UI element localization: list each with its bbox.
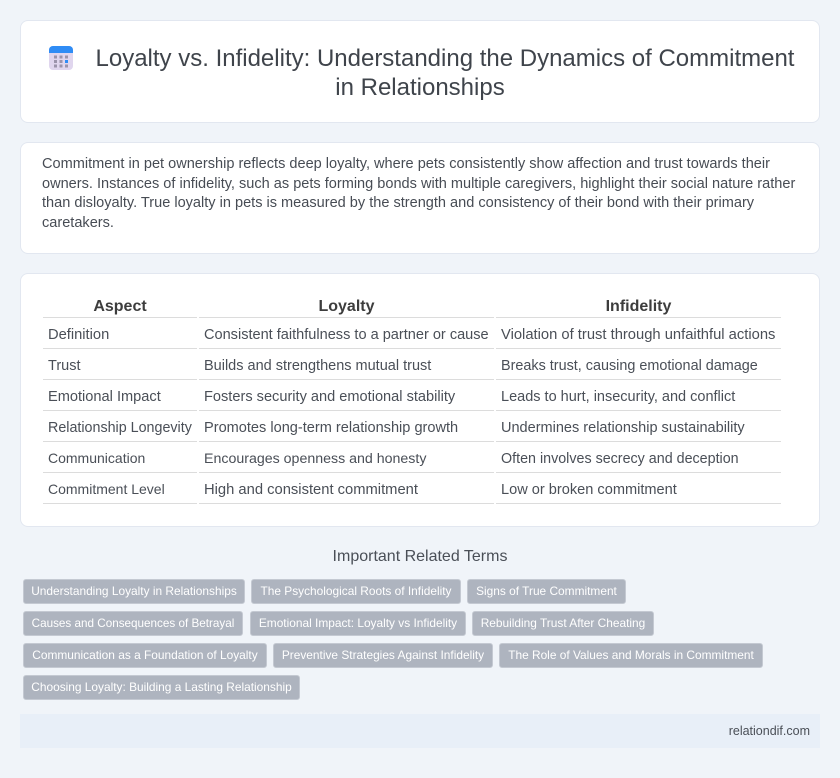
row: Trust: Trust <box>48 358 80 374</box>
row: Relationship Longevity: Relationship Longevity <box>48 420 192 436</box>
Trust infidelity: Breaks trust, causing emotional damage <box>501 358 758 374</box>
Emotional Impact infidelity: Leads to hurt, insecurity, and conflict <box>501 389 735 405</box>
Emotional Impact loyalty: Fosters security and emotional stability <box>204 389 455 405</box>
intro text: Commitment in pet ownership reflects deep loyalty, where pets consistently show affection and trust towards their <box>42 156 770 172</box>
row: Commitment Level: Commitment Level <box>48 481 165 497</box>
tag: Causes and Consequences of Betrayal <box>32 617 234 630</box>
panel: introduction <box>20 142 820 254</box>
tag: The Psychological Roots of Infidelity <box>260 584 452 598</box>
panel: header <box>20 20 820 123</box>
intro text: than disloyalty. True loyalty in pets is measured by the strength and consistency of their bond with their primary <box>42 195 754 211</box>
tag: Choosing Loyalty: Building a Lasting Relationship <box>31 680 292 694</box>
Communication loyalty: Encourages openness and honesty <box>204 451 426 467</box>
tag: Emotional Impact: Loyalty vs Infidelity <box>259 616 457 630</box>
title <box>96 45 794 101</box>
tag <box>251 579 461 604</box>
panel: comparison table <box>20 273 820 527</box>
icon: calendar <box>49 46 73 70</box>
title: in Relationships <box>335 74 505 101</box>
tag <box>472 611 654 636</box>
row: Definition: Definition <box>48 327 109 343</box>
footer bar <box>20 714 820 748</box>
Commitment Level infidelity: Low or broken commitment <box>501 482 677 498</box>
tag: Communication as a Foundation of Loyalty <box>32 648 258 662</box>
tag <box>23 643 267 668</box>
footer source: relationdif.com <box>729 724 810 738</box>
Commitment Level loyalty: High and consistent commitment <box>204 482 418 498</box>
Communication infidelity: Often involves secrecy and deception <box>501 451 739 467</box>
tag <box>467 579 626 604</box>
Relationship Longevity loyalty: Promotes long-term relationship growth <box>204 420 458 436</box>
row: Emotional Impact: Emotional Impact <box>48 389 161 405</box>
tag: Understanding Loyalty in Relationships <box>31 584 237 598</box>
tag <box>273 643 493 668</box>
intro text <box>42 156 796 231</box>
tag <box>499 643 763 668</box>
heading: related terms: Important Related Terms <box>333 548 507 565</box>
Relationship Longevity infidelity: Undermines relationship sustainability <box>501 420 745 436</box>
header: Infidelity: Infidelity <box>606 298 671 315</box>
intro text: owners. Instances of infidelity, such as pets forming bonds with multiple caregivers, highlight their social nature rather <box>42 176 795 192</box>
row: Communication: Communication <box>48 450 145 466</box>
tag: Rebuilding Trust After Cheating <box>481 616 645 630</box>
Definition loyalty: Consistent faithfulness to a partner or cause <box>204 327 489 343</box>
tag <box>23 675 300 700</box>
tag <box>23 611 243 636</box>
Trust loyalty: Builds and strengthens mutual trust <box>204 358 431 374</box>
intro text: caretakers. <box>42 215 114 231</box>
title: Loyalty vs. Infidelity: Understanding the Dynamics of Commitment <box>96 45 794 72</box>
header: Aspect: Aspect <box>93 298 147 315</box>
Definition infidelity: Violation of trust through unfaithful actions <box>501 327 775 343</box>
tag <box>250 611 466 636</box>
tag <box>23 579 245 604</box>
header: Loyalty: Loyalty <box>318 298 374 315</box>
tag: Preventive Strategies Against Infidelity <box>282 648 484 662</box>
tag: Signs of True Commitment <box>476 584 617 598</box>
tag: The Role of Values and Morals in Commitment <box>508 648 754 662</box>
